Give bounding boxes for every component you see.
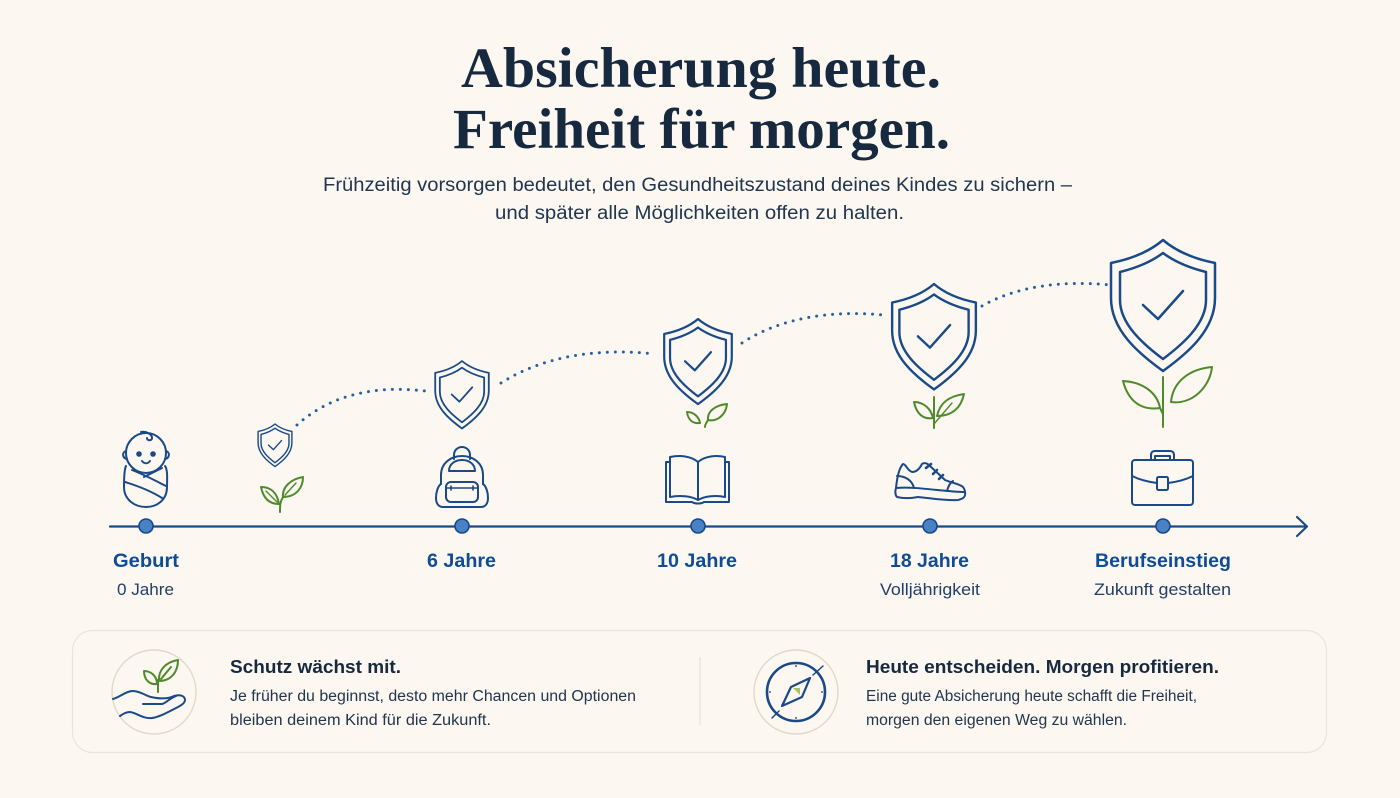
shield 10 years	[664, 319, 732, 404]
subtitle	[323, 175, 1072, 224]
label: Geburt: Geburt	[113, 551, 180, 572]
label: Berufseinstieg	[1094, 551, 1231, 599]
text: Schutz wächst mit: Schutz wächst mit.	[230, 656, 401, 677]
subtitle: Frühzeitig vorsorgen bedeutet, den Gesundheitszustand deines Kindes zu sichern –	[323, 175, 1072, 196]
title: Freiheit für morgen.	[453, 98, 950, 161]
shield small	[258, 424, 292, 467]
shield career	[1111, 240, 1215, 371]
title	[453, 37, 950, 161]
label: 18 Jahre: 18 Jahre	[890, 551, 969, 572]
label: Berufseinstieg: Zukunft gestalten	[1094, 581, 1231, 599]
sprout 3	[914, 394, 964, 428]
text: Schutz wächst mit: Je früher du beginnst, desto mehr Chancen und Optionen	[230, 688, 636, 705]
shield 18 years	[892, 284, 976, 389]
sprout 2	[687, 404, 727, 427]
timeline axis with arrow	[110, 517, 1307, 536]
timeline markers	[139, 519, 1170, 533]
icon: sneaker	[895, 463, 965, 500]
label: 6 Jahre: 6 Jahre	[427, 551, 496, 572]
text: Heute entscheiden: Heute entscheiden. Morgen profitieren.	[866, 656, 1219, 677]
text: Schutz wächst mit	[230, 656, 636, 729]
icon: open book	[666, 456, 729, 504]
icon: compass	[754, 650, 838, 734]
text: Heute entscheiden: morgen den eigenen Weg zu wählen.	[866, 712, 1127, 729]
label: 18 Jahre	[880, 551, 980, 599]
title: Absicherung heute.	[461, 37, 941, 100]
icon: briefcase	[1132, 451, 1193, 505]
subtitle: und später alle Möglichkeiten offen zu halten.	[495, 203, 904, 224]
icon: swaddled baby	[123, 432, 169, 507]
text: Heute entscheiden: Eine gute Absicherung heute schafft die Freiheit,	[866, 688, 1197, 705]
sprout 1	[261, 477, 303, 512]
sprout 4	[1123, 367, 1212, 427]
text: Heute entscheiden	[866, 656, 1219, 729]
dotted growth curves	[297, 283, 1110, 425]
label: Geburt: 0 Jahre	[117, 581, 174, 599]
panel: key messages	[72, 630, 1326, 752]
shield 6 years	[435, 361, 489, 428]
label: 18 Jahre: Volljährigkeit	[880, 581, 980, 599]
label: Berufseinstieg: Berufseinstieg	[1095, 551, 1231, 572]
text: Schutz wächst mit: bleiben deinem Kind für die Zukunft.	[230, 712, 491, 729]
label: 10 Jahre: 10 Jahre	[657, 551, 737, 572]
icon: hand with sprout	[112, 650, 196, 734]
icon: backpack	[436, 447, 488, 507]
label: Geburt	[113, 551, 180, 599]
